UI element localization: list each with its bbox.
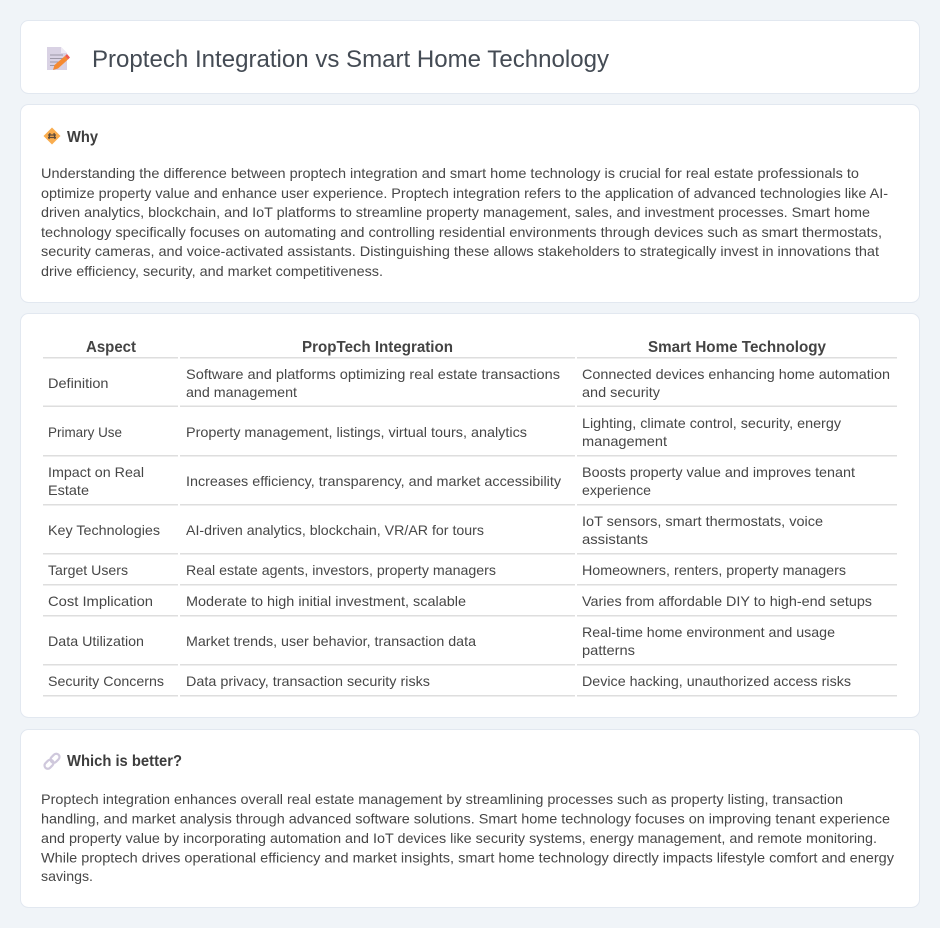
row: definition: Software and platforms optimizing real estate transactions [186, 366, 560, 382]
row: data utilization: patterns [582, 642, 635, 658]
row: security concerns [48, 673, 851, 689]
row: definition [48, 366, 890, 400]
row: key technologies: IoT sensors, smart thermostats, voice [582, 513, 823, 529]
row: impact on real estate: Impact on Real [48, 464, 144, 480]
row: definition: and security [582, 384, 660, 400]
text block: which is better paragraph: savings. [41, 868, 93, 884]
row: impact on real estate: Boosts property value and improves tenant [582, 464, 855, 480]
text block: why paragraph: drive efficiency, security, and market competitiveness. [41, 263, 383, 279]
row: primary use: Lighting, climate control, security, energy [582, 415, 841, 431]
row: target users: Homeowners, renters, property managers [582, 562, 846, 578]
row: security concerns: Security Concerns [48, 673, 164, 689]
text block: why paragraph [41, 165, 888, 279]
text block: which is better paragraph: and property value by incorporating automation and IoT devices like security systems, energy management, and remote monitoring. [41, 830, 877, 846]
row: target users: Real estate agents, investors, property managers [186, 562, 496, 578]
text block: why paragraph: security cameras, and voice-activated assistants. Distinguishing these allows stakeholders to strategically invest in innovations that [41, 243, 879, 259]
icon: document with pencil [47, 47, 70, 70]
row: impact on real estate [48, 464, 855, 498]
icon: chain link [43, 752, 61, 770]
row: impact on real estate: Increases efficiency, transparency, and market accessibility [186, 473, 561, 489]
panel: which is better [20, 730, 920, 908]
row: cost implication: Moderate to high initial investment, scalable [186, 593, 466, 609]
row: security concerns: Device hacking, unauthorized access risks [582, 673, 851, 689]
row: impact on real estate: Estate [48, 482, 89, 498]
panel: why [20, 104, 920, 302]
row: impact on real estate: experience [582, 482, 651, 498]
row: data utilization: Market trends, user behavior, transaction data [186, 633, 476, 649]
row: data utilization: Data Utilization [48, 633, 144, 649]
row: cost implication [48, 593, 872, 609]
text block: why paragraph: technology specifically focuses on automating and controlling residential environments through devices such as smart thermostats, [41, 224, 882, 240]
row: definition: and management [186, 384, 297, 400]
row: cost implication: Cost Implication [48, 593, 153, 609]
panel: title header [20, 20, 920, 94]
row: definition: Connected devices enhancing home automation [582, 366, 890, 382]
text block: which is better paragraph: While proptech drives operational efficiency and market insights, smart home technology directly impacts lifestyle comfort and energy [41, 850, 894, 866]
heading: why: Why [67, 129, 98, 146]
table header row: PropTech Integration [302, 339, 453, 356]
text block: which is better paragraph [41, 791, 894, 884]
text block: why paragraph: optimize property value and enhance user experience. Proptech integration refers to the application of advanced technologies like AI- [41, 185, 888, 201]
table header row: Aspect [86, 339, 137, 356]
table rules [43, 357, 897, 696]
row: cost implication: Varies from affordable DIY to high-end setups [582, 593, 872, 609]
title: Proptech Integration vs Smart Home Technology [92, 46, 609, 73]
row: primary use [48, 415, 841, 449]
row: definition: Definition [48, 375, 108, 391]
row: data utilization: Real-time home environment and usage [582, 624, 835, 640]
table header row [86, 339, 826, 356]
row: data utilization [48, 624, 835, 658]
icon: warning diamond [44, 128, 60, 144]
row: key technologies: AI-driven analytics, blockchain, VR/AR for tours [186, 522, 484, 538]
row: primary use: management [582, 433, 667, 449]
text block: why paragraph: Understanding the difference between proptech integration and smart home technology is crucial for real estate professionals to [41, 165, 859, 181]
text block: why paragraph: driven analytics, blockchain, and IoT platforms to streamline property management, sales, and investment processes. Smart home [41, 204, 870, 220]
text block: which is better paragraph: handling, and market analysis through advanced software solutions. Smart home technology focuses on improving tenant experience [41, 810, 890, 826]
row: key technologies: assistants [582, 531, 648, 547]
text block: which is better paragraph: Proptech integration enhances overall real estate management by streamlining processes such as property listing, transaction [41, 791, 843, 807]
row: target users [48, 562, 846, 578]
heading: which is better: Which is better? [67, 753, 182, 770]
row: security concerns: Data privacy, transaction security risks [186, 673, 430, 689]
row: primary use: Primary Use [48, 424, 122, 440]
row: primary use: Property management, listings, virtual tours, analytics [186, 424, 527, 440]
row: key technologies [48, 513, 823, 547]
row: target users: Target Users [48, 562, 128, 578]
row: key technologies: Key Technologies [48, 522, 160, 538]
table header row: Smart Home Technology [648, 339, 826, 356]
panel: comparison table [20, 314, 920, 718]
